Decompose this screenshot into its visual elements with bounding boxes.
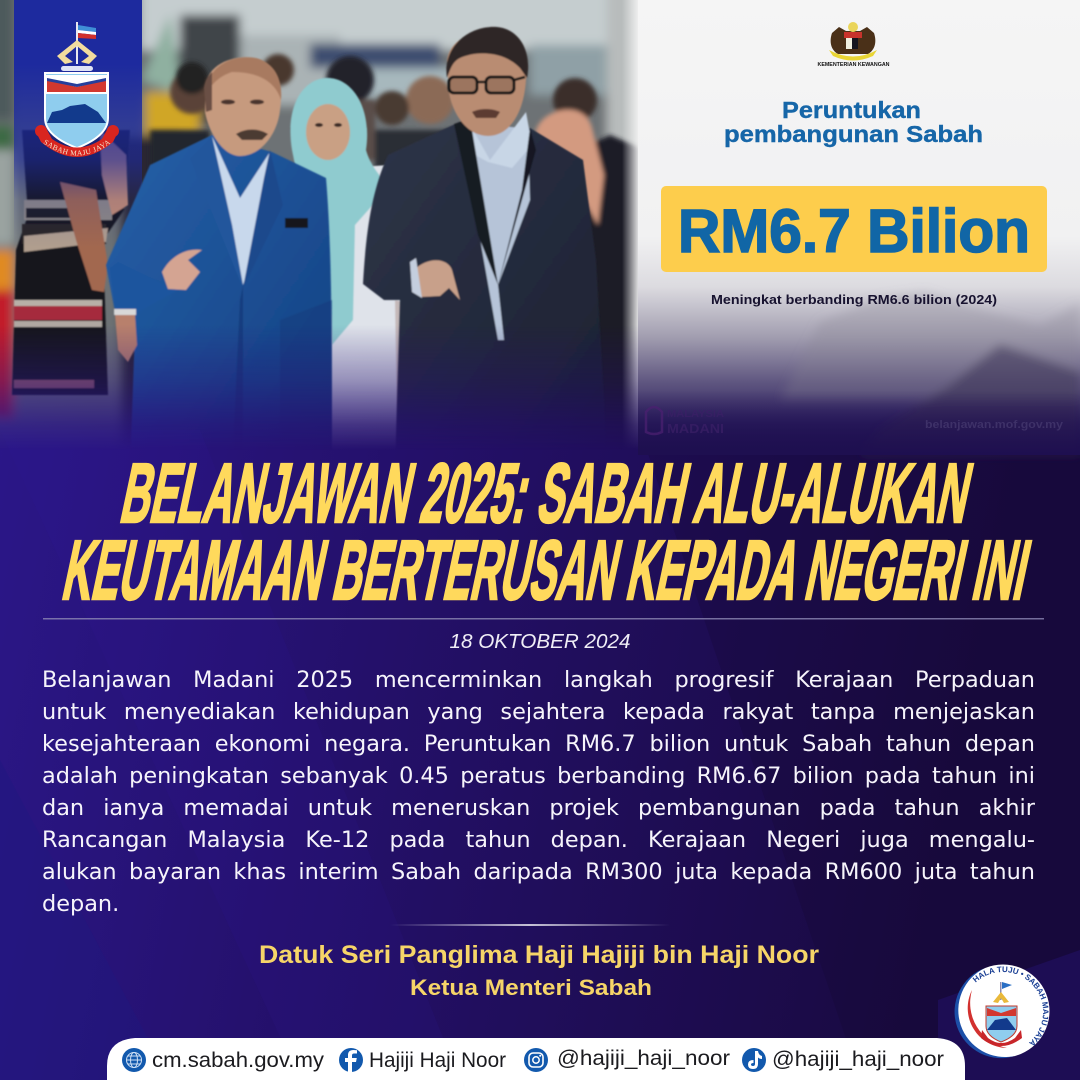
- gold clasped hands: [57, 40, 97, 71]
- body text paragraph: untuk menyediakan kehidupan yang sejahtera kepada rakyat tanpa menjejaskan: [42, 699, 1035, 725]
- amount highlight box: RM6.7 Bilion: [678, 197, 1030, 265]
- title: [56, 446, 1038, 617]
- heading: pembangunan Sabah: [724, 121, 983, 147]
- shield: [45, 73, 108, 148]
- tiktok label: @hajiji_haji_noor: [772, 1048, 944, 1071]
- man in blue suit: Hajiji: [106, 57, 332, 470]
- instagram label: @hajiji_haji_noor: [557, 1047, 730, 1070]
- icon: website globe: [122, 1048, 146, 1072]
- website watermark: belanjawan.mof.gov.my: [925, 419, 1064, 431]
- facebook label: Hajiji Haji Noor: [369, 1049, 506, 1072]
- icon: tiktok: [742, 1048, 766, 1072]
- panel: Kementerian Kewangan budget card: [638, 0, 1080, 455]
- seal crest: [981, 982, 1022, 1046]
- body text paragraph: depan.: [42, 891, 119, 917]
- Malaysia Madani watermark: [646, 407, 724, 436]
- soft photo edge: [622, 0, 638, 444]
- man in dark suit: Anwar: [363, 27, 606, 470]
- icon: facebook: [339, 1048, 363, 1072]
- scroll motto: SABAH MAJU JAYA: [44, 140, 110, 156]
- background crowd heads: [150, 54, 645, 470]
- body text paragraph: Belanjawan Madani 2025 mencerminkan langkah progresif Kerajaan Perpaduan: [42, 667, 1035, 693]
- Malaysia Madani watermark: MADANI: [667, 421, 724, 436]
- budget fade: [638, 390, 1080, 455]
- woman in patterned traditional dress: [12, 130, 130, 395]
- social media bar: [107, 1038, 965, 1080]
- body text paragraph: dan ianya memadai untuk meneruskan projek pembangunan pada tahun akhir: [42, 795, 1035, 821]
- body text paragraph: Rancangan Malaysia Ke-12 pada tahun depan. Kerajaan Negeri juga mengalu-: [42, 827, 1035, 853]
- crest banner: [14, 0, 142, 230]
- ministry crest: [818, 22, 890, 68]
- heading: Peruntukan: [782, 97, 921, 123]
- body text paragraph: alukan bayaran khas interim Sabah daripada RM300 juta kepada RM600 juta tahun: [42, 859, 1035, 885]
- date: 18 OKTOBER 2024: [450, 631, 630, 653]
- mountain range with clouds: [780, 292, 1080, 455]
- photo: leaders walking with entourage: [0, 0, 638, 444]
- speaker role: Ketua Menteri Sabah: [410, 975, 652, 1000]
- woman in teal hijab: [290, 76, 401, 440]
- comparison note: Meningkat berbanding RM6.6 bilion (2024): [711, 292, 997, 307]
- body text paragraph: adalah peningkatan sebanyak 0.45 peratus berbanding RM6.67 bilion pada tahun ini: [42, 763, 1035, 789]
- Malaysia Madani watermark: MALAYSIA: [667, 409, 724, 420]
- website label: cm.sabah.gov.my: [152, 1049, 325, 1072]
- icon: instagram: [524, 1048, 548, 1072]
- speaker name: Datuk Seri Panglima Haji Hajiji bin Haji Noor: [259, 941, 819, 969]
- body text paragraph: [42, 667, 1035, 917]
- photo backdrop: blurred terminal hall: [0, 0, 638, 436]
- heading: [724, 97, 983, 147]
- round seal: Hala Tuju Sabah Maju Jaya: HALA TUJU • SABAH MAJU JAYA: [972, 966, 1049, 1046]
- flag on pole: [76, 22, 96, 64]
- body text paragraph: kesejahteraan ekonomi negara. Peruntukan RM6.7 bilion untuk Sabah tahun depan: [42, 731, 1035, 757]
- Sabah state crest: [35, 22, 119, 157]
- ministry name: KEMENTERIAN KEWANGAN: [818, 62, 890, 68]
